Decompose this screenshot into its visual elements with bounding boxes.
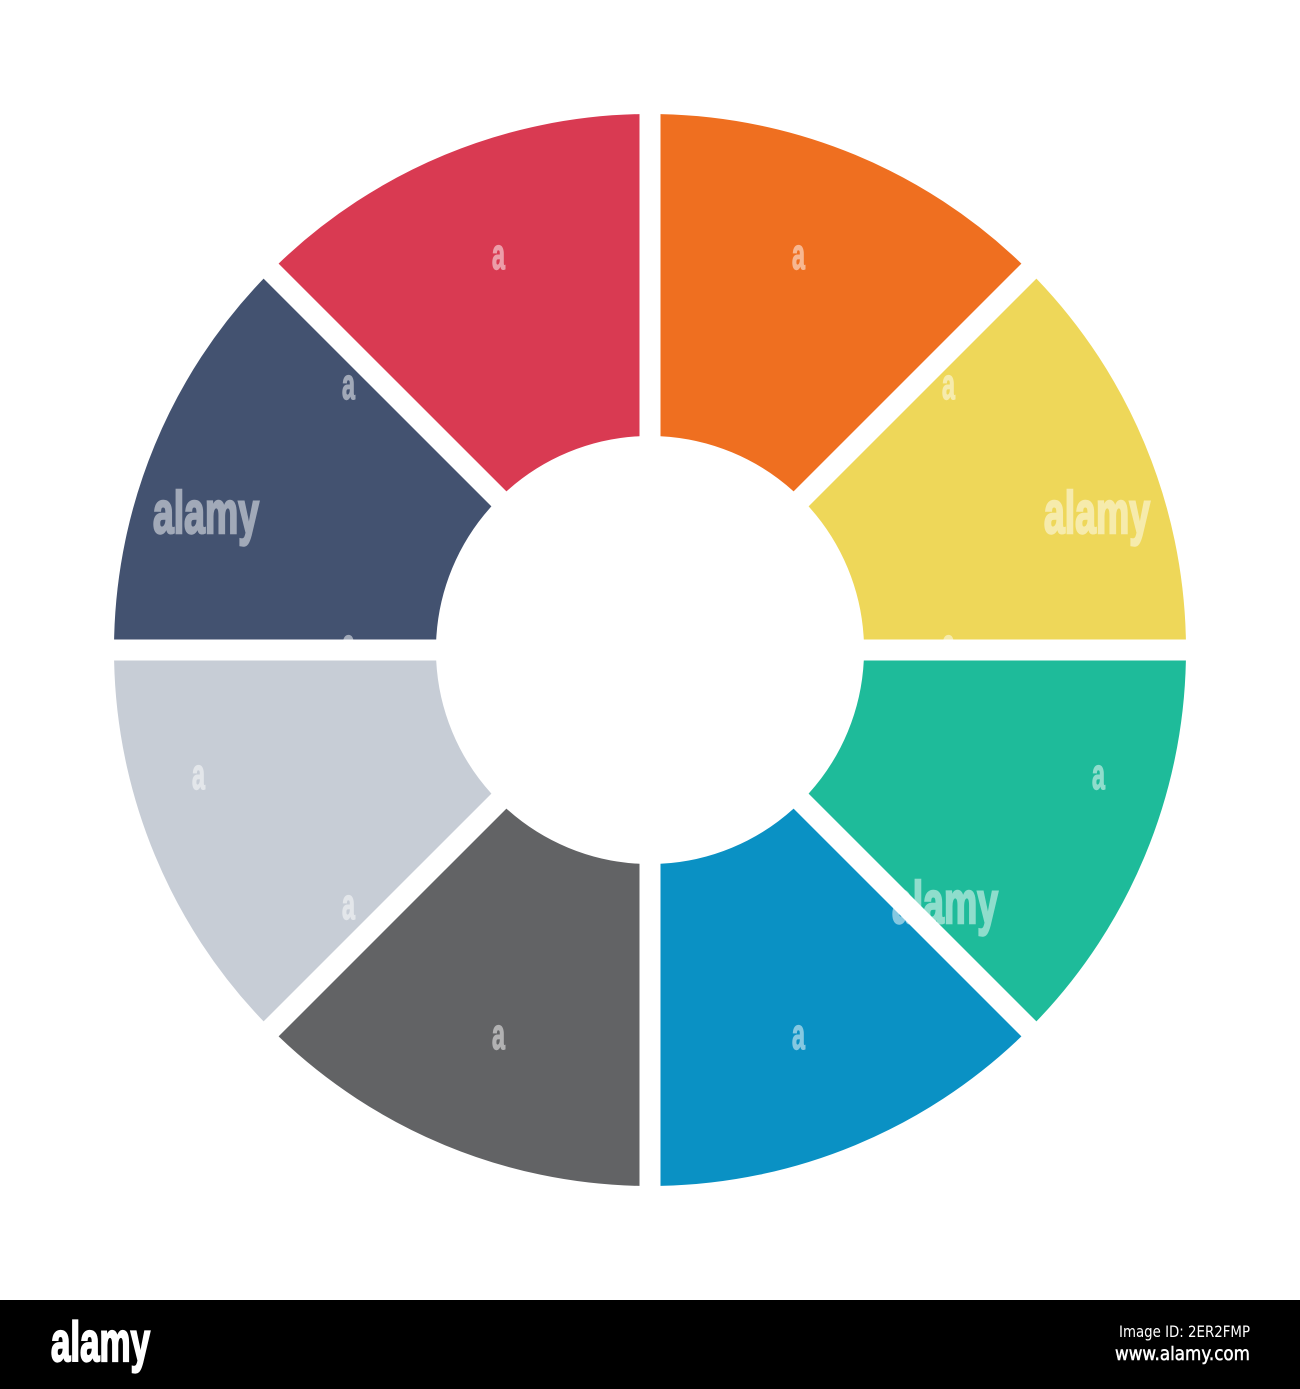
segment: blue <box>660 809 1021 1186</box>
watermark: yellow segment: alamy <box>1044 480 1150 546</box>
donut chart: eight segments <box>114 114 1186 1186</box>
watermarks over the wheel: a <box>492 230 505 279</box>
watermarks over the wheel: a <box>792 1010 805 1059</box>
segment: yellow <box>809 279 1186 640</box>
watermarks over the wheel: a <box>342 360 355 409</box>
watermark: navy segment: alamy <box>153 480 259 546</box>
watermarks over the wheel: a <box>342 880 355 929</box>
segment: light gray <box>114 660 491 1021</box>
watermarks over the wheel <box>153 230 1150 1059</box>
watermark: teal and blue segments: alamy <box>892 870 998 936</box>
segment: orange <box>660 114 1021 491</box>
footer logo: alamy <box>51 1310 150 1373</box>
image id: Image ID: 2ER2FMP <box>1119 1322 1250 1341</box>
segment: dark gray <box>279 809 640 1186</box>
segment: red <box>279 114 640 491</box>
watermarks over the wheel: a <box>342 620 355 669</box>
segment: navy <box>114 279 491 640</box>
website url: www.alamy.com <box>1115 1343 1250 1365</box>
footer bar <box>0 1300 1300 1389</box>
watermarks over the wheel: a <box>942 620 955 669</box>
watermarks over the wheel: a <box>942 360 955 409</box>
segment: teal <box>809 660 1186 1021</box>
watermarks over the wheel: a <box>1092 750 1105 799</box>
watermarks over the wheel: a <box>492 1010 505 1059</box>
watermarks over the wheel: a <box>192 750 205 799</box>
watermarks over the wheel: a <box>792 230 805 279</box>
